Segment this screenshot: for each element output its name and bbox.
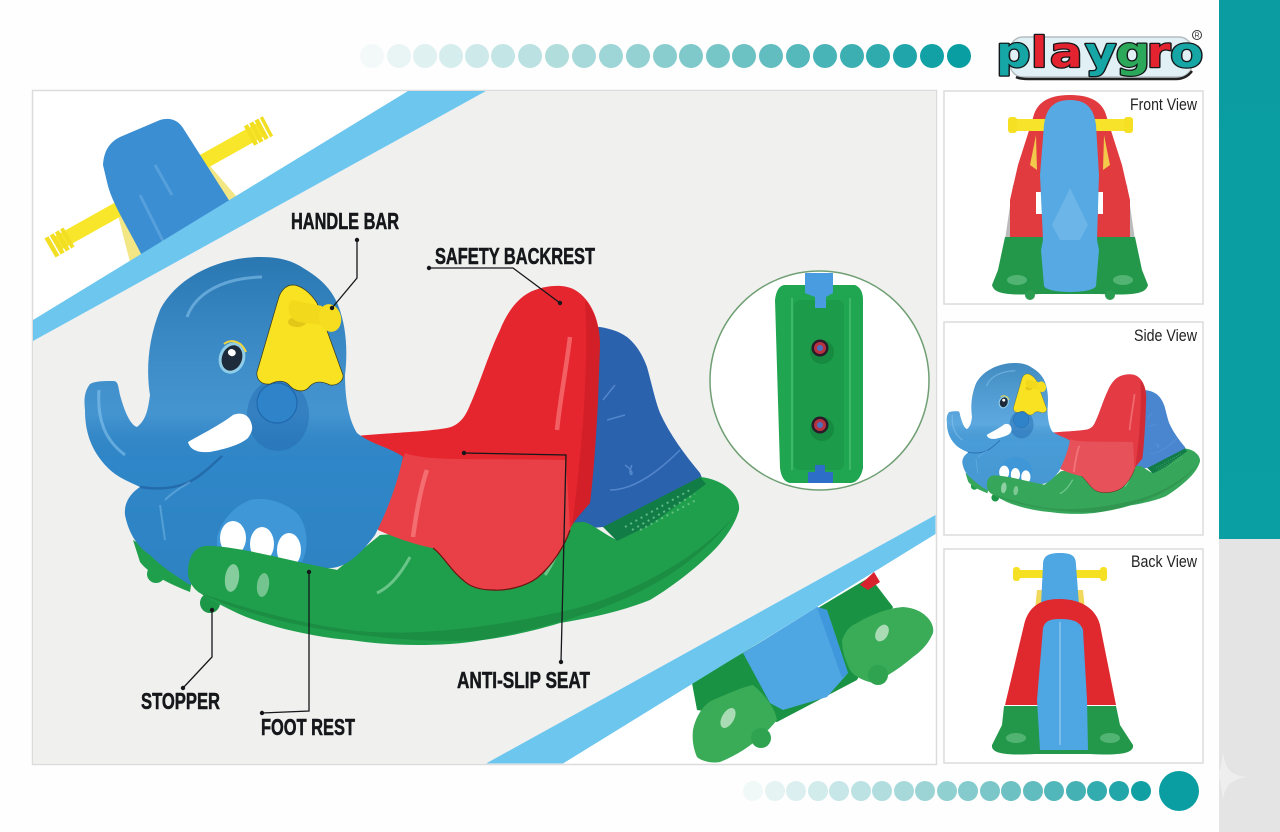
back blue shell [570, 327, 705, 535]
back view toy [992, 553, 1133, 755]
red seat [357, 286, 600, 590]
callout lines [181, 238, 566, 715]
ear [257, 285, 343, 391]
top dot row [360, 44, 971, 68]
label: front view: Front View [1130, 95, 1198, 114]
green foot rest lip [188, 546, 345, 606]
bottom dot row [743, 771, 1199, 811]
blue stripe bottom [486, 515, 936, 764]
label: foot rest: FOOT REST [261, 714, 355, 740]
label: back view: Back View [1131, 552, 1198, 571]
side view toy [947, 363, 1200, 514]
label: handle bar: HANDLE BAR [291, 208, 399, 234]
label: stopper: STOPPER [141, 688, 220, 714]
front view toy [992, 95, 1148, 300]
toes [220, 521, 301, 567]
handle peg [288, 300, 344, 334]
blue stripe top [33, 91, 486, 341]
tusk [188, 414, 252, 452]
eye [214, 339, 250, 377]
main panel [32, 90, 936, 764]
bottom-right underside view of toy [692, 572, 933, 763]
nose pocket [247, 379, 309, 451]
green rocker base [188, 477, 739, 645]
panel: front view [944, 91, 1203, 304]
grey background band [33, 91, 936, 764]
logo: playgro: playgro [996, 28, 1203, 77]
panel: back view [944, 549, 1203, 763]
panel: side view [944, 322, 1203, 535]
top-left overhead view of toy [50, 119, 268, 262]
logo: playgro: R [1194, 32, 1200, 40]
label: safety backrest: SAFETY BACKREST [435, 243, 595, 269]
main toy: elephant rocker [85, 257, 739, 645]
label: side view: Side View [1134, 326, 1198, 345]
side bar [1219, 0, 1280, 832]
inset circle: underside detail [710, 271, 929, 490]
label: anti-slip seat: ANTI-SLIP SEAT [457, 667, 590, 693]
elephant body [85, 257, 403, 585]
foot arch [217, 499, 307, 562]
